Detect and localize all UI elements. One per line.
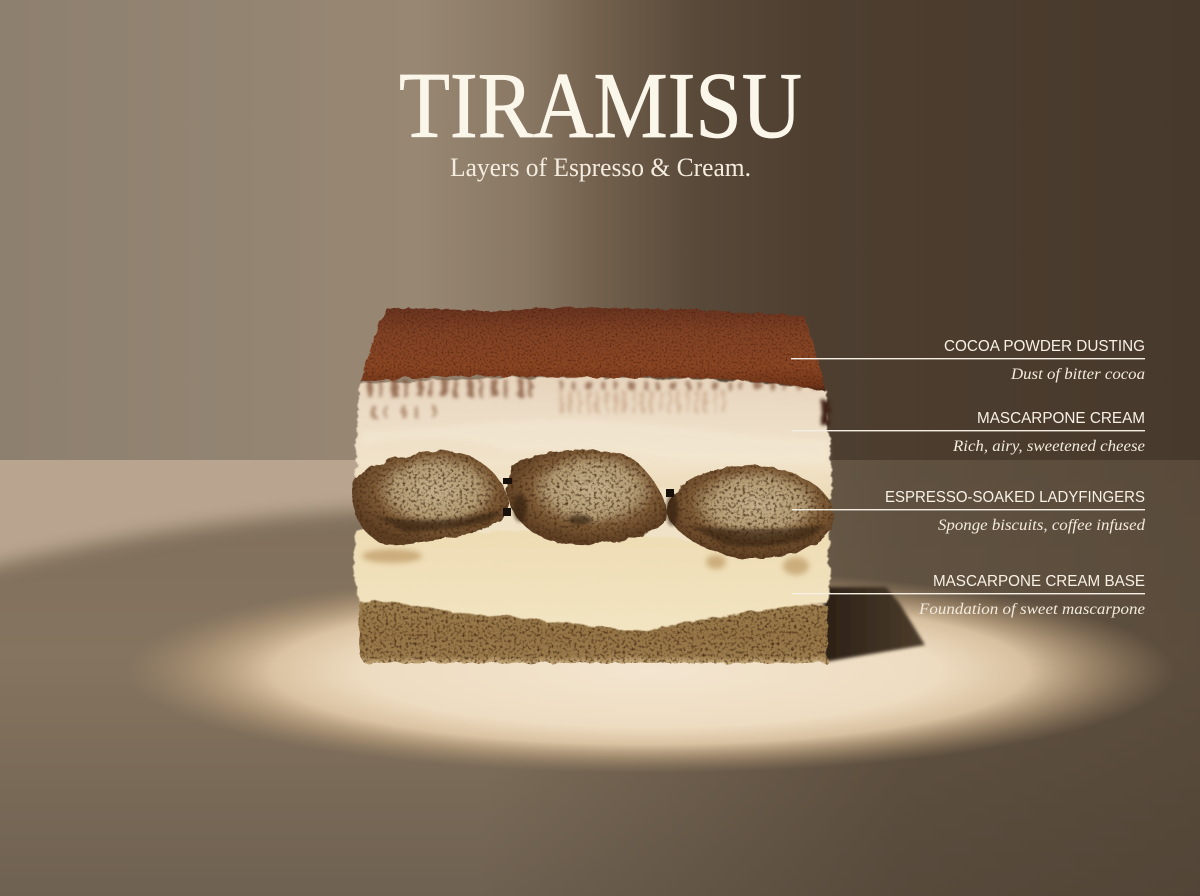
callout: espresso-soaked ladyfingers xyxy=(792,489,1146,534)
cake: gaps between ladyfingers xyxy=(503,478,674,516)
callout: mascarpone cream base: Foundation of sweet mascarpone xyxy=(918,601,1145,618)
cake: cream highlight band xyxy=(362,420,828,462)
lit band behind the cake on the left xyxy=(0,460,359,574)
cake: ladyfingers xyxy=(352,450,834,558)
callout: mascarpone cream: Rich, airy, sweetened cheese xyxy=(952,438,1145,455)
callout: mascarpone cream base: MASCARPONE CREAM BASE xyxy=(933,573,1145,590)
callout: cocoa powder dusting xyxy=(791,338,1145,383)
title: TIRAMISU xyxy=(399,54,802,158)
cake: cocoa drips into cream xyxy=(368,386,825,425)
cake: base sponge layer xyxy=(359,599,828,663)
cake: lower cream coffee stains xyxy=(362,549,809,575)
cake: cream underlay xyxy=(364,390,826,596)
callout: espresso-soaked ladyfingers: Sponge biscuits, coffee infused xyxy=(938,517,1146,534)
callout: espresso-soaked ladyfingers: ESPRESSO-SOAKED LADYFINGERS xyxy=(885,489,1145,506)
callout: mascarpone cream xyxy=(792,410,1145,455)
ladyfinger right xyxy=(666,466,834,558)
background: wall xyxy=(0,0,1200,462)
spotlight pool xyxy=(125,569,1175,773)
background: table surface with light pool xyxy=(0,440,1200,896)
callout: cocoa powder dusting: COCOA POWDER DUSTING xyxy=(944,338,1145,355)
cake: cocoa powder top xyxy=(361,308,826,392)
callout: cocoa powder dusting: Dust of bitter cocoa xyxy=(1010,366,1145,383)
callout: mascarpone cream base xyxy=(792,573,1145,618)
subtitle: Layers of Espresso & Cream. xyxy=(450,153,751,182)
callout: mascarpone cream: MASCARPONE CREAM xyxy=(977,410,1145,427)
cake: dark espresso soak under ladyfingers xyxy=(375,494,824,547)
cake: upper mascarpone layer xyxy=(356,377,832,500)
ladyfinger middle xyxy=(506,450,667,544)
tiramisu slice illustration xyxy=(352,308,834,663)
cake cast shadow xyxy=(824,587,925,662)
ladyfinger left xyxy=(352,451,508,545)
cake: lower mascarpone layer xyxy=(354,530,830,631)
